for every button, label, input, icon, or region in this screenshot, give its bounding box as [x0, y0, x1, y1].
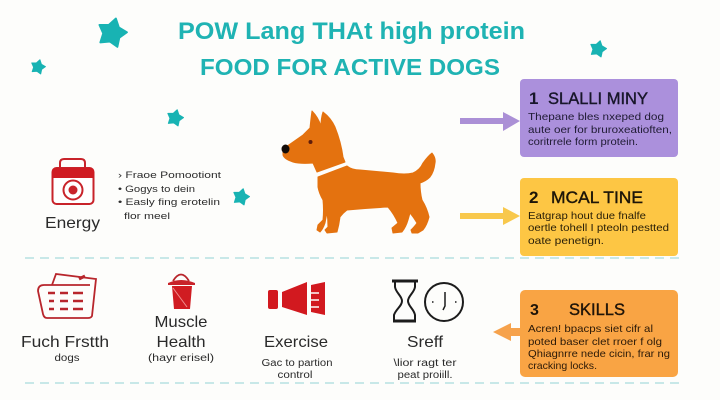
icon: small star by dog [234, 189, 250, 205]
title: FOOD FOR ACTIVE DOGS [200, 54, 500, 80]
title: POW Lang THAt high protein [178, 18, 525, 45]
energy bullet list: › Fraoe Pomootiont [118, 170, 221, 181]
icon: hourglass and clock [392, 281, 463, 321]
exercise label: control [278, 370, 312, 381]
sreff label: \lior ragt ter [394, 358, 457, 369]
fresh label [21, 334, 109, 364]
panel: step 1: aute oer for bruroxeatioften, [528, 124, 672, 136]
arrow: orange [493, 323, 520, 341]
panel: step 1 [520, 79, 678, 157]
icon: small star left [32, 60, 46, 74]
icon: basket [38, 274, 96, 318]
energy bullet list: flor meel [124, 211, 170, 222]
panel: step 3: 3 [530, 302, 539, 319]
panel: step 2 [520, 178, 678, 256]
energy bullet list [118, 170, 221, 222]
panel: step 3 [520, 290, 678, 377]
icon: small star centre left [168, 110, 184, 126]
muscle health label: Health [156, 334, 206, 351]
exercise label: Exercise [264, 334, 328, 351]
fresh label: Fuch Frstth [21, 334, 109, 351]
panel: step 3: cracking locks. [528, 360, 597, 372]
panel: step 1: SLALLI MINY [548, 89, 648, 108]
icon: small star right [591, 41, 606, 57]
muscle health label: Muscle [154, 314, 208, 331]
energy bullet list: • Easly fing erotelin [118, 197, 220, 208]
panel: step 2: oertle tohell I pteoln pestted [528, 222, 669, 234]
muscle health label [148, 314, 214, 364]
panel: step 3: poted baser clet rroer f olg [528, 336, 662, 348]
panel: step 3: Acren! bpacps siet cifr al [528, 323, 653, 335]
exercise label: Gac to partion [262, 358, 332, 369]
icon: bucket [168, 274, 195, 309]
panel: step 1: 1 [529, 89, 538, 108]
arrow: yellow [460, 207, 520, 225]
panel: step 2: Eatgrap hout due fnalfe [528, 210, 646, 222]
fresh label: dogs [54, 353, 80, 364]
panel: step 1: coritrrele form protein. [528, 136, 638, 148]
energy bullet list: • Gogys to dein [118, 184, 195, 195]
arrow: purple [460, 112, 520, 131]
panel: step 2: MCAL TINE [551, 188, 643, 207]
title [178, 18, 525, 80]
icon: dog [282, 111, 435, 233]
panel: step 2: 2 [529, 188, 538, 207]
muscle health label: (hayr erisel) [148, 353, 214, 364]
icon: energy case [52, 159, 94, 204]
exercise label [262, 334, 332, 381]
icon: megaphone [268, 282, 325, 315]
energy label: Energy [45, 215, 100, 232]
sreff label [394, 334, 457, 381]
icon: large star top left [99, 18, 127, 47]
panel: step 3: Qhiagnrre nede cicin, frar ng [528, 348, 670, 360]
panel: step 2: oate penetign. [528, 235, 604, 247]
panel: step 1: Thepane bles nxeped dog [528, 111, 664, 123]
sreff label: peat proiill. [398, 370, 452, 381]
panel: step 3: SKILLS [569, 300, 625, 319]
sreff label: Sreff [407, 334, 444, 351]
